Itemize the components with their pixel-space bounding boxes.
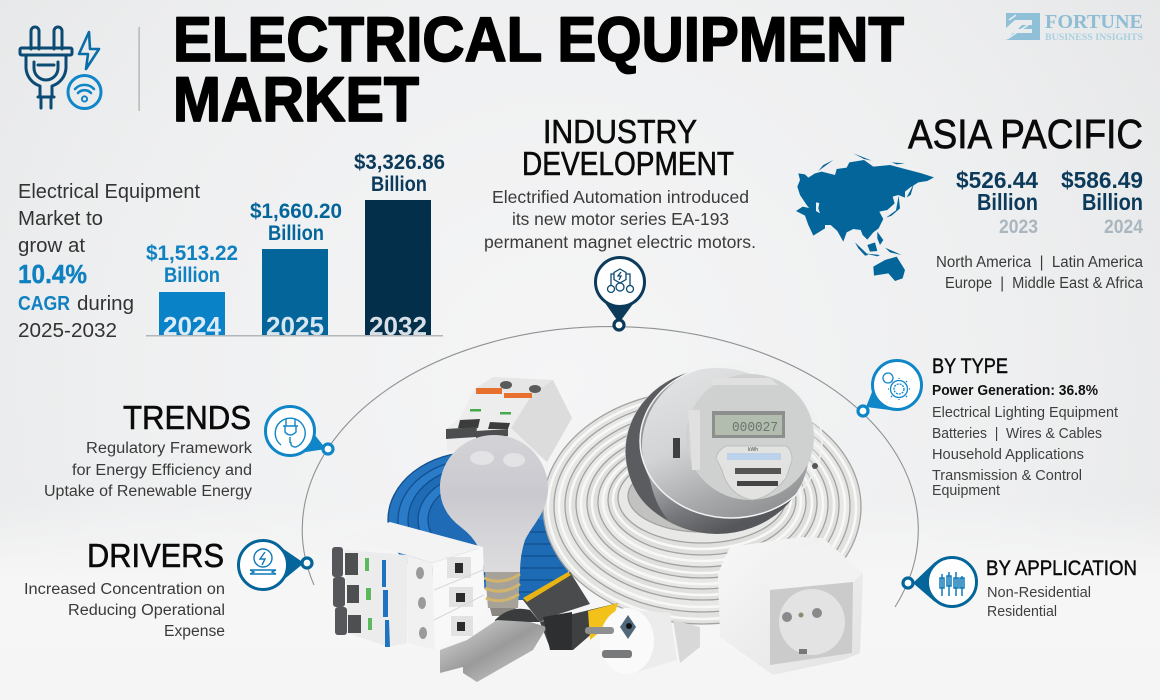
trends text: Uptake of Renewable Energy — [44, 483, 252, 500]
icon: gears — [883, 373, 910, 400]
asia pacific values — [956, 167, 1143, 238]
bar 2024: 2024 — [163, 311, 222, 341]
map: Asia Pacific — [796, 153, 934, 281]
bar 2025: Billion — [268, 222, 324, 245]
bar 2024: Billion — [164, 264, 220, 287]
white cable coil — [543, 390, 861, 624]
bar 2032: 2032 — [369, 311, 427, 341]
by type text: Household Applications — [932, 446, 1084, 463]
value 2023: Billion — [977, 189, 1038, 215]
value 2024: Billion — [1082, 189, 1143, 215]
other regions: North America | Latin America — [936, 254, 1143, 271]
by application text: Residential — [987, 603, 1057, 620]
text: CAGR statement — [18, 181, 200, 342]
trends text: for Energy Efficiency and — [72, 462, 252, 479]
drivers text: Reducing Operational — [68, 602, 225, 619]
text: CAGR statement: grow at — [18, 235, 85, 257]
top circuit breaker — [446, 377, 572, 462]
value 2023: $526.44 — [956, 167, 1038, 193]
light bulb — [440, 435, 548, 616]
by type text: Batteries | Wires & Cables — [932, 425, 1102, 442]
bar 2025 — [250, 200, 342, 341]
pin: by type — [858, 360, 922, 416]
icon: gears and bolt — [608, 269, 634, 292]
by type text: BY TYPE — [932, 355, 1008, 378]
text: CAGR statement: during — [77, 293, 134, 315]
industry development text: DEVELOPMENT — [522, 145, 734, 182]
title: MARKET — [173, 65, 419, 135]
by type text: Electrical Lighting Equipment — [932, 404, 1119, 421]
logo: Fortune Business Insights: BUSINESS INSIGHTS — [1045, 33, 1143, 43]
pliers — [440, 572, 618, 682]
logo: Fortune Business Insights — [1006, 11, 1143, 43]
connecting arc — [302, 327, 918, 607]
smart meter — [625, 364, 822, 534]
by type text: Transmission & Control — [932, 467, 1082, 484]
title: ELECTRICAL EQUIPMENT — [173, 5, 904, 75]
industry development text: permanent magnet electric motors. — [484, 232, 756, 252]
drivers text: Increased Concentration on — [24, 581, 225, 598]
bar 2032 — [354, 151, 445, 341]
pin: by application — [903, 558, 976, 606]
text: CAGR statement: 10.4% — [18, 259, 87, 289]
value 2024: 2024 — [1104, 217, 1143, 238]
title — [173, 5, 904, 135]
industry development text — [484, 113, 756, 252]
by type text: Equipment — [932, 482, 1001, 499]
industry development text: Electrified Automation introduced — [492, 187, 749, 207]
pin: trends — [266, 406, 333, 456]
by application text: BY APPLICATION — [986, 557, 1137, 580]
bar 2024 — [146, 242, 238, 341]
schuko plug — [585, 608, 700, 674]
other regions — [936, 254, 1143, 292]
bar 2032: $3,326.86 — [354, 151, 445, 174]
value 2023: 2023 — [999, 217, 1038, 238]
trends text — [44, 399, 252, 500]
pin: industry development — [596, 258, 644, 330]
icon: wrench and bolt — [250, 549, 276, 574]
blue cable coil — [388, 452, 570, 600]
bar 2025: $1,660.20 — [250, 200, 342, 223]
modular circuit breaker block — [332, 522, 485, 650]
smart meter: kWh — [748, 447, 758, 453]
text: CAGR statement: CAGR — [18, 293, 70, 315]
trends text: Regulatory Framework — [86, 440, 252, 457]
value 2024: $586.49 — [1061, 167, 1143, 193]
value 2023 — [956, 167, 1038, 238]
by application text — [986, 557, 1137, 620]
bar chart — [146, 151, 445, 341]
by type text — [932, 355, 1119, 499]
industry development text: INDUSTRY — [543, 113, 697, 150]
pin: drivers — [238, 540, 312, 590]
header divider — [138, 27, 140, 111]
bar 2032: Billion — [371, 173, 427, 196]
icon: plug — [275, 418, 305, 447]
industry development text: its new motor series EA-193 — [512, 209, 729, 229]
by type text: Power Generation: 36.8% — [932, 383, 1098, 399]
value 2024 — [1061, 167, 1143, 238]
text: CAGR statement: 2025-2032 — [18, 320, 117, 342]
icon: cables — [940, 572, 964, 596]
icon: plug with bolt and wifi — [20, 27, 101, 108]
product photo: electrical equipment — [332, 364, 863, 682]
trends text: TRENDS — [123, 399, 251, 436]
by application text: Non-Residential — [987, 584, 1091, 601]
drivers text — [24, 537, 225, 640]
drivers text: Expense — [164, 623, 225, 640]
text: CAGR statement: Market to — [18, 208, 103, 230]
bar 2025: 2025 — [266, 311, 324, 341]
smart meter: 000027 — [732, 420, 778, 436]
other regions: Europe | Middle East & Africa — [945, 275, 1143, 292]
bar 2024: $1,513.22 — [146, 242, 238, 265]
wall socket — [718, 537, 863, 675]
logo: Fortune Business Insights: FORTUNE — [1045, 11, 1143, 33]
text: CAGR statement: Electrical Equipment — [18, 181, 200, 203]
drivers text: DRIVERS — [87, 537, 224, 574]
